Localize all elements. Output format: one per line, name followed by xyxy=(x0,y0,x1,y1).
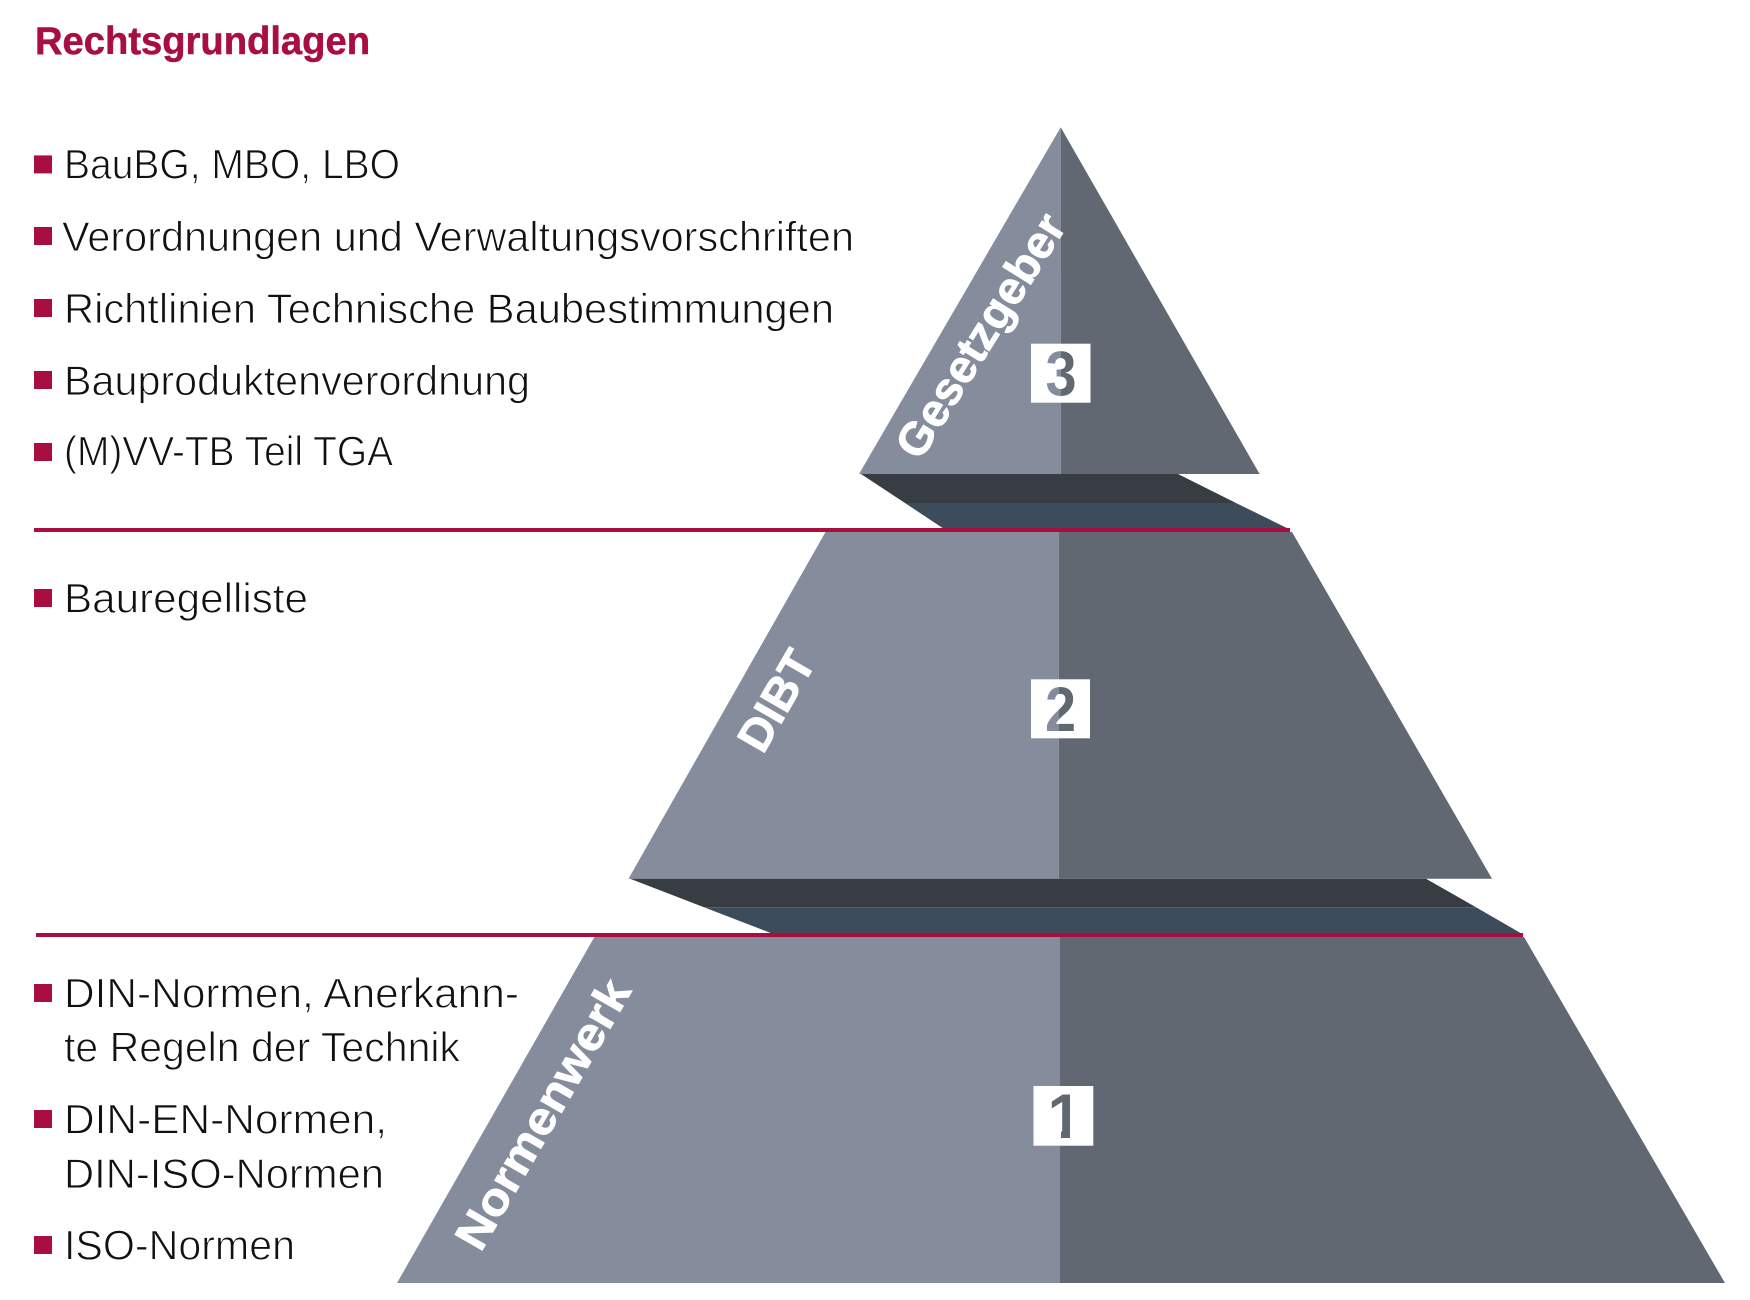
item: DIN-EN-Normen, DIN-ISO-Normen: DIN-ISO-Normen xyxy=(64,1150,384,1197)
list: DIBT items xyxy=(34,574,308,622)
item: Richtlinien Technische Baubestimmungen: Richtlinien Technische Baubestimmungen xyxy=(64,285,834,332)
item: DIN-Normen, Anerkannte Regeln der Technik: DIN-Normen, Anerkann- xyxy=(64,970,519,1016)
item: DIN-EN-Normen, DIN-ISO-Normen xyxy=(34,1096,387,1197)
label: DIBT: DIBT xyxy=(727,641,826,760)
label: Gesetzgeber: Gesetzgeber xyxy=(884,204,1076,467)
divider line lower xyxy=(36,933,1523,937)
item: Bauproduktenverordnung: Bauproduktenverordnung xyxy=(64,357,530,404)
pyramid tier 1: Normenwerk xyxy=(397,937,1725,1283)
title: Rechtsgrundlagen xyxy=(35,20,370,63)
number badge 1 xyxy=(1034,1086,1094,1146)
number badge 3: 3 xyxy=(1046,340,1076,410)
item: BauBG, MBO, LBO: BauBG, MBO, LBO xyxy=(64,141,400,188)
number badge 1: 1 xyxy=(1047,1082,1083,1152)
item: Bauregelliste: Bauregelliste xyxy=(64,574,308,622)
item: Verordnungen und Verwaltungsvorschriften: Verordnungen und Verwaltungsvorschriften xyxy=(62,213,854,260)
divider line upper xyxy=(34,528,1290,532)
pyramid tier 3: Gesetzgeber xyxy=(859,127,1291,530)
list: Gesetzgeber items xyxy=(34,141,854,474)
list: Normenwerk items xyxy=(34,970,519,1268)
number badge 3 xyxy=(1031,340,1090,410)
item: (M)VV-TB Teil TGA: (M)VV-TB Teil TGA xyxy=(64,427,393,474)
label: Normenwerk: Normenwerk xyxy=(444,969,641,1258)
number badge 2 xyxy=(1031,675,1090,745)
pyramid tier 2: DIBT xyxy=(628,532,1524,935)
item: DIN-Normen, Anerkannte Regeln der Technik xyxy=(34,970,519,1070)
number badge 2: 2 xyxy=(1045,675,1076,745)
item: ISO-Normen: ISO-Normen xyxy=(64,1222,295,1268)
item: DIN-Normen, Anerkannte Regeln der Technik: te Regeln der Technik xyxy=(64,1024,460,1070)
pyramid xyxy=(397,127,1725,1283)
item: DIN-EN-Normen, DIN-ISO-Normen: DIN-EN-Normen, xyxy=(64,1096,387,1142)
